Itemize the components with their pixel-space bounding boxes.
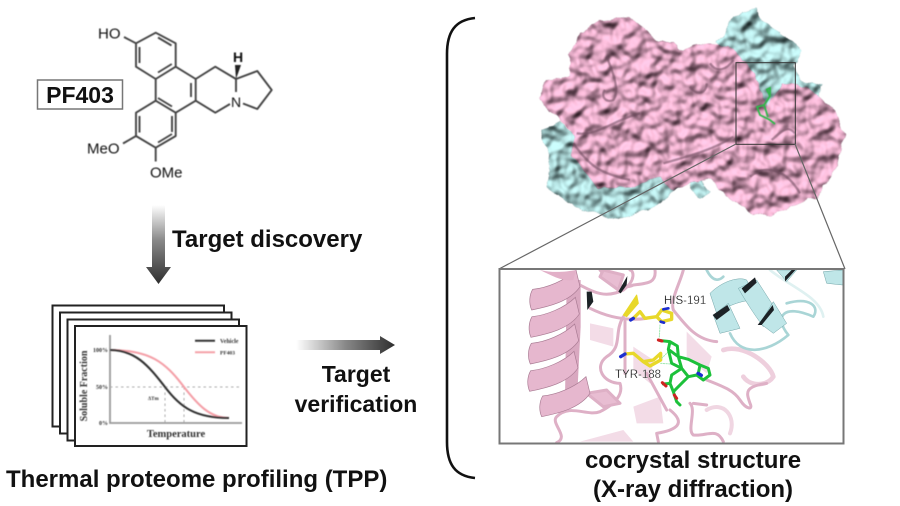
atom labels: HO [98,26,120,42]
hydrogen bonds [659,325,672,364]
pale background sheets [580,323,712,442]
thermal proteome profiling chart stack [52,306,246,446]
melting curve chart: 50% [96,385,108,391]
compound label box: PF403: PF403 [46,82,114,108]
teal ribbon [707,270,815,350]
pink helix [565,280,581,400]
melting curve chart: 100% [93,348,108,354]
melting curve chart: Vehicle [220,339,239,345]
selection box [736,63,795,144]
atom labels: H [233,49,243,65]
caption: cocrystal structure: (X-ray diffraction) [593,476,793,503]
caption: Thermal proteome profiling: Thermal proteome profiling (TPP) [6,466,387,493]
residue label: HIS-191: HIS-191 [664,295,706,307]
bracket [447,18,475,478]
pink loops [555,270,767,443]
melting curve chart: Soluble Fraction [79,350,90,421]
residue label: TYR-188: TYR-188 [615,369,661,381]
atom labels [87,26,243,182]
melting curve chart: Temperature [147,429,205,440]
surface creases [573,57,800,193]
atom labels: N [231,94,241,110]
teal subunit [542,8,823,218]
pink subunit [537,17,845,217]
atom labels: OMe [150,164,183,182]
caption: cocrystal structure: cocrystal structure [585,447,801,474]
melting curve chart: 0% [99,421,108,427]
text: Target verification: Target [322,361,391,387]
melting curve chart: PF403 [220,350,235,356]
text: Target verification [295,361,417,417]
yellow residue: HIS-191 [621,295,710,405]
text: Target verification: verification [295,391,417,417]
arrow: target discovery [146,205,171,284]
stereo wedge [235,65,241,79]
arrow: target verification [296,336,395,354]
melting curve chart [79,335,242,440]
melting curve chart: ΔTm [148,397,159,402]
ligand in surface [757,88,775,124]
dark ribbon undersides [587,269,796,325]
atom labels: MeO [87,140,120,158]
yellow residue: TYR-188 [625,353,661,366]
ribbon cartoon [528,269,843,443]
green ligand [661,341,710,405]
chemical structure: PF403 [87,26,272,182]
teal helix [710,270,843,333]
protein surface [537,8,845,218]
zoom guide lines [499,144,845,269]
heading: Target discovery: Target discovery [172,226,363,253]
caption: cocrystal structure [585,447,801,503]
panel: binding site cocrystal detail [500,269,844,444]
